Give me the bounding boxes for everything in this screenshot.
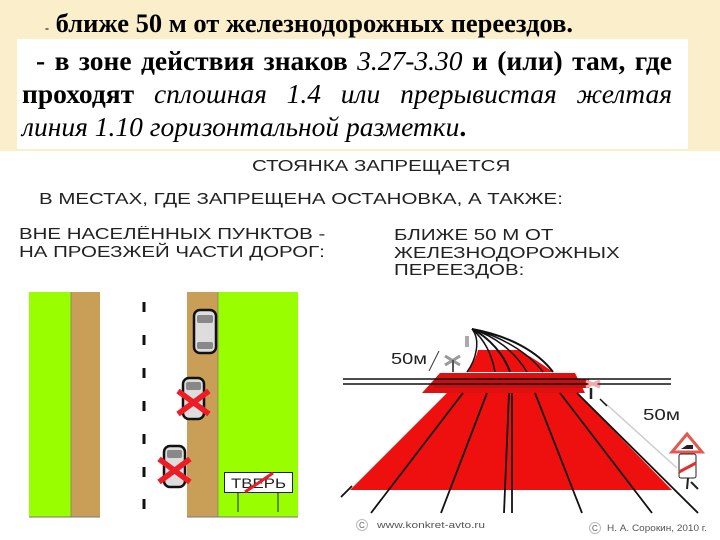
left heading: outside settlements bbox=[19, 226, 325, 261]
text: signs and markings rule: линия 1.10 горизонтальной разметки. bbox=[22, 111, 466, 142]
road markings in foreground bbox=[341, 393, 698, 513]
distance arrow: 50 m to warning sign: 50м bbox=[643, 407, 680, 424]
left heading: outside settlements: ВНЕ НАСЕЛЁННЫХ ПУНКТОВ - bbox=[19, 226, 325, 243]
crossing barrier marker bbox=[586, 381, 600, 399]
text: railway crossing line: - ближе 50 м от железнодорожных переездов. bbox=[45, 8, 573, 38]
copyright: author: C bbox=[592, 524, 598, 533]
right heading: near railway crossings: ПЕРЕЕЗДОВ: bbox=[394, 262, 524, 279]
railway tracks bbox=[343, 379, 671, 384]
subheading: where stopping is prohibited: В МЕСТАХ, ГДЕ ЗАПРЕЩЕНА ОСТАНОВКА, А ТАКЖЕ: bbox=[39, 191, 563, 208]
red no-parking zone near crossing bbox=[350, 350, 672, 490]
road centre dashed line bbox=[142, 302, 146, 509]
left heading: outside settlements: НА ПРОЕЗЖЕЙ ЧАСТИ ДОРОГ: bbox=[19, 244, 325, 261]
copyright: author: Н. А. Сорокин, 2010 г. bbox=[607, 523, 707, 533]
right heading: near railway crossings: ЖЕЛЕЗНОДОРОЖНЫХ bbox=[394, 244, 620, 262]
warning sign: railway crossing bbox=[672, 434, 702, 489]
right heading: near railway crossings bbox=[394, 227, 620, 279]
heading: parking prohibited: СТОЯНКА ЗАПРЕЩАЕТСЯ bbox=[252, 158, 510, 175]
copyright: website: C bbox=[359, 521, 365, 530]
car crossed out on roadway bbox=[159, 446, 190, 487]
distance label: far side 50 m: 50м bbox=[391, 351, 427, 368]
text: signs and markings rule: проходят сплошная 1.4 или прерывистая желтая bbox=[22, 78, 672, 109]
left verge: grass and shoulder bbox=[29, 292, 100, 517]
road markings in distance bbox=[467, 329, 553, 372]
panel: white text box bbox=[17, 39, 688, 149]
copyright: author bbox=[590, 522, 707, 534]
text: signs and markings rule: - в зоне действия знаков 3.27-3.30 и (или) там, где bbox=[36, 45, 672, 76]
distance arrow: 50 m to warning sign bbox=[600, 399, 680, 468]
settlement exit sign: Tver: ТВЕРЬ bbox=[231, 475, 286, 491]
right heading: near railway crossings: БЛИЖЕ 50 М ОТ bbox=[394, 227, 553, 244]
right verge: shoulder and grass bbox=[187, 292, 298, 517]
text: signs and markings rule bbox=[20, 45, 672, 142]
copyright: website: www.konkret-avto.ru bbox=[376, 520, 485, 530]
settlement exit sign: Tver bbox=[224, 472, 292, 512]
distance label: far side 50 m bbox=[391, 351, 439, 371]
far-side crossing sign bbox=[445, 336, 467, 372]
parked car: allowed on shoulder bbox=[194, 310, 216, 353]
car crossed out on road edge bbox=[178, 378, 209, 419]
copyright: website bbox=[356, 520, 485, 530]
header panel: cream background bbox=[0, 0, 720, 151]
